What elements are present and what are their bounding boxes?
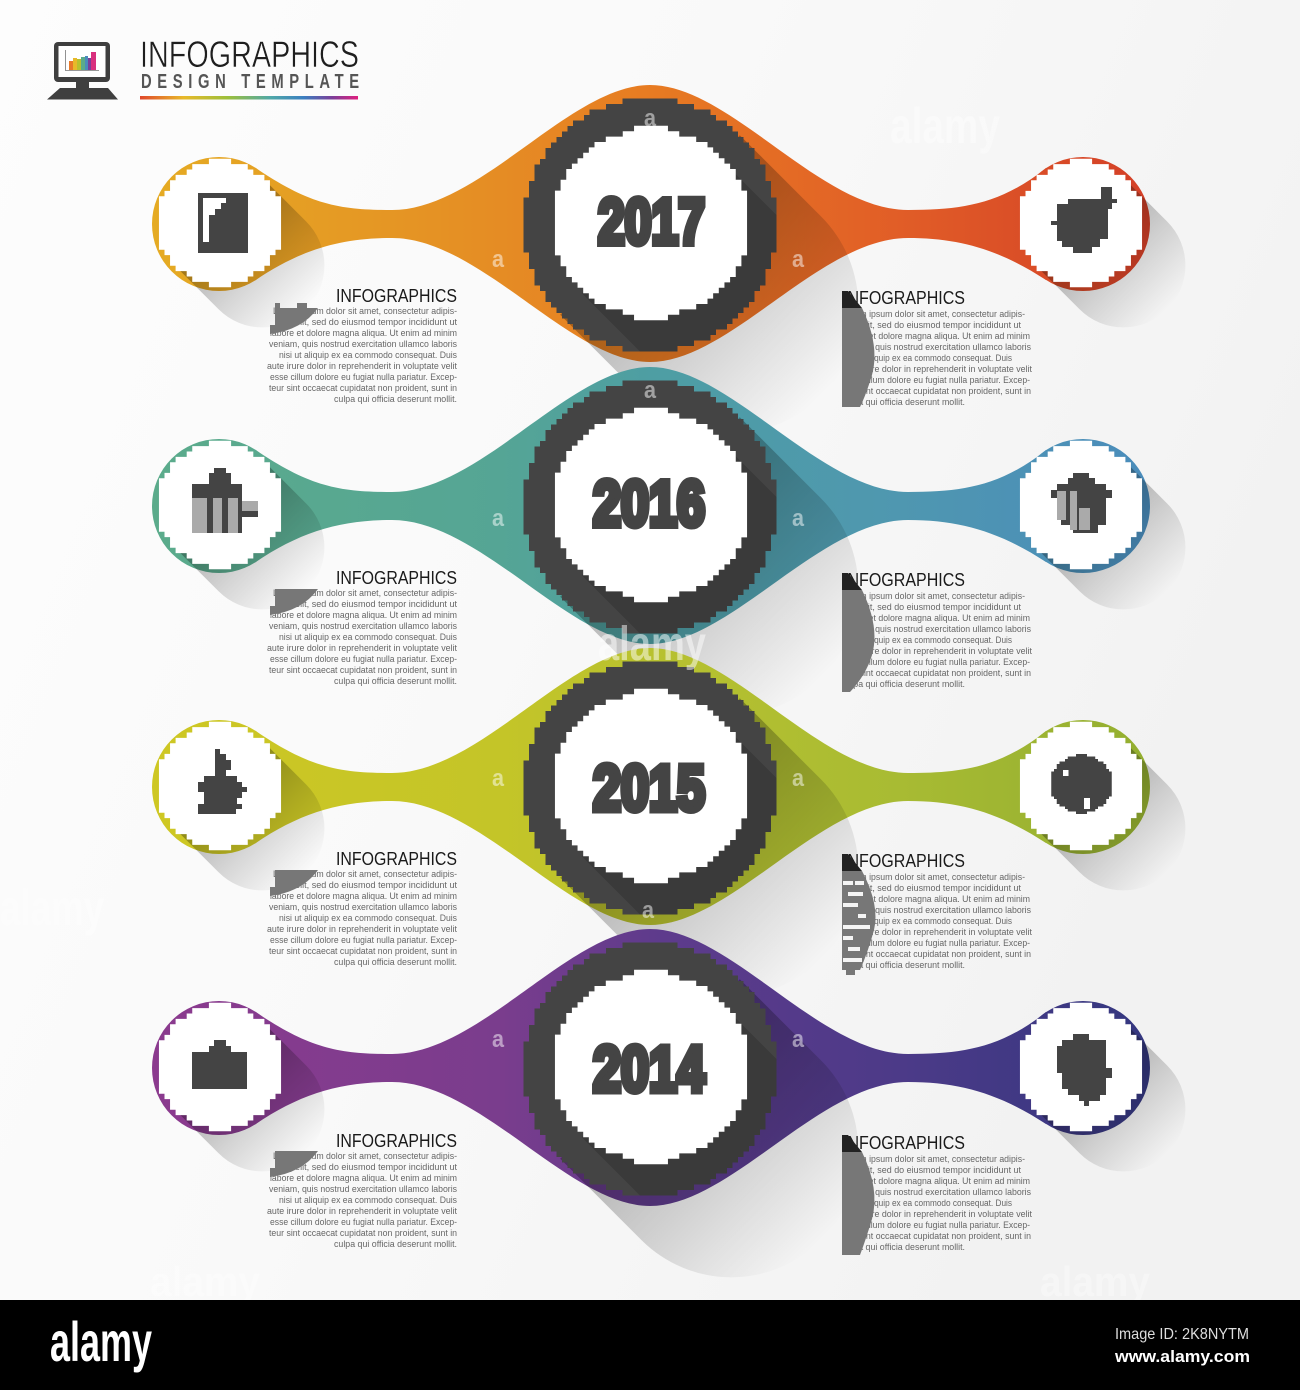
- right text block: culpa qui officia deserunt mollit.: [842, 960, 965, 971]
- right text block: Lorem ipsum dolor sit amet, consectetur adipis-: [842, 872, 1025, 883]
- right text block: labore et dolore magna aliqua. Ut enim ad minim: [842, 331, 1030, 342]
- year: 2016: [593, 468, 705, 540]
- left text block: teur sint occaecat cupidatat non proident, sunt in: [269, 946, 457, 957]
- left image artifact: [270, 1151, 318, 1177]
- left text block: labore et dolore magna aliqua. Ut enim ad minim: [270, 610, 457, 621]
- watermarks: a: [492, 765, 505, 792]
- right text block: veniam, quis nostrud exercitation ullamco laboris: [842, 342, 1031, 353]
- band: purple: [152, 929, 1150, 1206]
- right text block: nisi ut aliquip ex ea commodo consequat. Duis: [842, 635, 1012, 646]
- left icon circle: house: [159, 441, 281, 569]
- left text block: INFOGRAPHICS: [336, 849, 457, 869]
- right text block: cing elit, sed do eiusmod tempor incididunt ut: [842, 1165, 1021, 1176]
- watermarks: alamy: [890, 98, 1000, 154]
- left text block: aute irure dolor in reprehenderit in voluptate velit: [267, 1206, 457, 1217]
- long shadows: [176, 417, 1211, 768]
- left image artifact: [270, 303, 318, 334]
- watermarks: a: [792, 1026, 805, 1053]
- right text block: aute irure dolor in reprehenderit in voluptate velit: [842, 927, 1032, 938]
- left text block: esse cillum dolore eu fugiat nulla pariatur. Excep-: [270, 372, 457, 383]
- watermarks: a: [792, 765, 805, 792]
- center year circle: [524, 380, 776, 634]
- left text block: cing elit, sed do eiusmod tempor incididunt ut: [276, 1162, 457, 1173]
- left text block: Lorem ipsum dolor sit amet, consectetur adipis-: [273, 869, 457, 880]
- left image artifact: [270, 870, 318, 896]
- left text block: veniam, quis nostrud exercitation ullamco laboris: [269, 902, 457, 913]
- row: 2017: [152, 85, 1186, 418]
- watermarks: a: [792, 246, 805, 273]
- left text block: esse cillum dolore eu fugiat nulla pariatur. Excep-: [270, 935, 457, 946]
- right text block: [842, 570, 1032, 690]
- footer url: www.alamy.com: [1114, 1347, 1250, 1366]
- right text block: [842, 288, 1032, 408]
- center year circle: [524, 942, 776, 1196]
- row: 2016: [152, 367, 1186, 699]
- right text block: Lorem ipsum dolor sit amet, consectetur adipis-: [842, 591, 1025, 602]
- watermarks: a: [792, 505, 805, 532]
- year: 2017: [598, 186, 705, 258]
- title: INFOGRAPHICS: [140, 34, 359, 75]
- watermarks: a: [492, 505, 505, 532]
- right text block: [842, 1133, 1032, 1253]
- watermarks: a: [642, 897, 655, 924]
- left text block: nisi ut aliquip ex ea commodo consequat. Duis: [279, 350, 457, 361]
- right text block: veniam, quis nostrud exercitation ullamco laboris: [842, 905, 1031, 916]
- left text block: culpa qui officia deserunt mollit.: [334, 676, 457, 687]
- right text block: INFOGRAPHICS: [843, 570, 965, 590]
- left text block: [267, 568, 457, 687]
- right text block: labore et dolore magna aliqua. Ut enim ad minim: [842, 1176, 1030, 1187]
- long shadows: [176, 135, 1211, 486]
- long shadows: [176, 698, 1211, 1049]
- left text block: teur sint occaecat cupidatat non proident, sunt in: [269, 1228, 457, 1239]
- left text block: aute irure dolor in reprehenderit in voluptate velit: [267, 924, 457, 935]
- left text block: [267, 286, 457, 405]
- watermarks: a: [644, 105, 657, 132]
- right text block: esse cillum dolore eu fugiat nulla pariatur. Excep-: [842, 938, 1030, 949]
- watermarks: a: [492, 1026, 505, 1053]
- right text block: labore et dolore magna aliqua. Ut enim ad minim: [842, 894, 1030, 905]
- icon: computer monitor with bar chart: [47, 42, 118, 100]
- left text block: culpa qui officia deserunt mollit.: [334, 957, 457, 968]
- watermarks: a: [644, 377, 657, 404]
- right text block: nisi ut aliquip ex ea commodo consequat. Duis: [842, 916, 1012, 927]
- right text block: Lorem ipsum dolor sit amet, consectetur adipis-: [842, 309, 1025, 320]
- left text block: Lorem ipsum dolor sit amet, consectetur adipis-: [273, 306, 457, 317]
- right text block: cing elit, sed do eiusmod tempor incididunt ut: [842, 320, 1021, 331]
- center year circle: [524, 98, 776, 352]
- row: 2014: [152, 929, 1186, 1277]
- right image artifact: [842, 573, 874, 692]
- footer bar: [0, 1300, 1300, 1390]
- right image artifact: [842, 1135, 874, 1255]
- left image artifact: [270, 589, 318, 615]
- left text block: veniam, quis nostrud exercitation ullamco laboris: [269, 1184, 457, 1195]
- right text block: aute irure dolor in reprehenderit in voluptate velit: [842, 364, 1032, 375]
- left text block: nisi ut aliquip ex ea commodo consequat. Duis: [279, 632, 457, 643]
- right text block: labore et dolore magna aliqua. Ut enim ad minim: [842, 613, 1030, 624]
- image id: Image ID: 2K8NYTM: [1115, 1326, 1249, 1343]
- left icon circle: briefcase: [159, 1003, 281, 1131]
- left icon circle: document: [159, 159, 281, 287]
- center year circle: [524, 662, 776, 914]
- right text block: teur sint occaecat cupidatat non proident, sunt in: [842, 668, 1031, 679]
- left text block: INFOGRAPHICS: [336, 568, 457, 588]
- right text block: INFOGRAPHICS: [843, 288, 965, 308]
- left text block: labore et dolore magna aliqua. Ut enim ad minim: [270, 328, 457, 339]
- right text block: culpa qui officia deserunt mollit.: [842, 1242, 965, 1253]
- right text block: culpa qui officia deserunt mollit.: [842, 679, 965, 690]
- footer logo: alamy: [50, 1310, 152, 1373]
- right text block: INFOGRAPHICS: [843, 851, 965, 871]
- left text block: teur sint occaecat cupidatat non proident, sunt in: [269, 383, 457, 394]
- right text block: teur sint occaecat cupidatat non proident, sunt in: [842, 1231, 1031, 1242]
- left text block: culpa qui officia deserunt mollit.: [334, 1239, 457, 1250]
- right text block: esse cillum dolore eu fugiat nulla pariatur. Excep-: [842, 1220, 1030, 1231]
- left text block: INFOGRAPHICS: [336, 1131, 457, 1151]
- right text block: teur sint occaecat cupidatat non proident, sunt in: [842, 386, 1031, 397]
- band: lime: [152, 648, 1150, 925]
- left text block: cing elit, sed do eiusmod tempor incididunt ut: [276, 599, 457, 610]
- left text block: teur sint occaecat cupidatat non proident, sunt in: [269, 665, 457, 676]
- right text block: esse cillum dolore eu fugiat nulla pariatur. Excep-: [842, 657, 1030, 668]
- watermarks: alamy: [150, 1258, 261, 1305]
- right text block: veniam, quis nostrud exercitation ullamco laboris: [842, 1187, 1031, 1198]
- right icon circle: globe: [1020, 722, 1142, 850]
- right text block: culpa qui officia deserunt mollit.: [842, 397, 965, 408]
- left text block: labore et dolore magna aliqua. Ut enim ad minim: [270, 1173, 457, 1184]
- left icon circle: thumbs up: [159, 722, 281, 850]
- left text block: Lorem ipsum dolor sit amet, consectetur adipis-: [273, 1151, 457, 1162]
- left text block: aute irure dolor in reprehenderit in voluptate velit: [267, 643, 457, 654]
- right text block: cing elit, sed do eiusmod tempor incididunt ut: [842, 602, 1021, 613]
- band: teal: [152, 367, 1150, 644]
- right icon circle: bomb: [1020, 159, 1142, 287]
- right text block: teur sint occaecat cupidatat non proident, sunt in: [842, 949, 1031, 960]
- right text block: Lorem ipsum dolor sit amet, consectetur adipis-: [842, 1154, 1025, 1165]
- left text block: INFOGRAPHICS: [336, 286, 457, 306]
- year: 2014: [593, 1033, 705, 1105]
- right text block: esse cillum dolore eu fugiat nulla pariatur. Excep-: [842, 375, 1030, 386]
- watermarks: a: [492, 246, 505, 273]
- right icon circle: shield: [1020, 1003, 1142, 1131]
- right text block: aute irure dolor in reprehenderit in voluptate velit: [842, 1209, 1032, 1220]
- long shadows: [176, 979, 1211, 1330]
- left text block: esse cillum dolore eu fugiat nulla pariatur. Excep-: [270, 1217, 457, 1228]
- rainbow underline: [140, 96, 358, 100]
- watermarks: [0, 98, 1151, 1305]
- right text block: nisi ut aliquip ex ea commodo consequat. Duis: [842, 353, 1012, 364]
- row: 2015: [152, 648, 1186, 980]
- watermarks: alamy: [598, 618, 706, 671]
- right text block: [842, 851, 1032, 971]
- right text block: cing elit, sed do eiusmod tempor incididunt ut: [842, 883, 1021, 894]
- right text block: veniam, quis nostrud exercitation ullamco laboris: [842, 624, 1031, 635]
- left text block: cing elit, sed do eiusmod tempor incididunt ut: [276, 880, 457, 891]
- left text block: culpa qui officia deserunt mollit.: [334, 394, 457, 405]
- header: [47, 34, 359, 100]
- left text block: veniam, quis nostrud exercitation ullamco laboris: [269, 621, 457, 632]
- right text block: nisi ut aliquip ex ea commodo consequat. Duis: [842, 1198, 1012, 1209]
- year: 2015: [593, 752, 705, 824]
- right icon circle: tree: [1020, 441, 1142, 569]
- left text block: Lorem ipsum dolor sit amet, consectetur adipis-: [273, 588, 457, 599]
- right image artifact: striped: [842, 854, 876, 975]
- watermarks: alamy: [0, 880, 104, 936]
- right text block: INFOGRAPHICS: [843, 1133, 965, 1153]
- left text block: nisi ut aliquip ex ea commodo consequat. Duis: [279, 1195, 457, 1206]
- right text block: aute irure dolor in reprehenderit in voluptate velit: [842, 646, 1032, 657]
- subtitle: DESIGN TEMPLATE: [141, 70, 359, 93]
- left text block: nisi ut aliquip ex ea commodo consequat. Duis: [279, 913, 457, 924]
- left text block: [267, 1131, 457, 1250]
- left text block: [267, 849, 457, 968]
- watermarks: alamy: [1040, 1258, 1151, 1305]
- band: orange: [152, 85, 1150, 362]
- left text block: veniam, quis nostrud exercitation ullamco laboris: [269, 339, 457, 350]
- right image artifact: [842, 291, 874, 407]
- left text block: esse cillum dolore eu fugiat nulla pariatur. Excep-: [270, 654, 457, 665]
- left text block: aute irure dolor in reprehenderit in voluptate velit: [267, 361, 457, 372]
- left text block: cing elit, sed do eiusmod tempor incididunt ut: [276, 317, 457, 328]
- left text block: labore et dolore magna aliqua. Ut enim ad minim: [270, 891, 457, 902]
